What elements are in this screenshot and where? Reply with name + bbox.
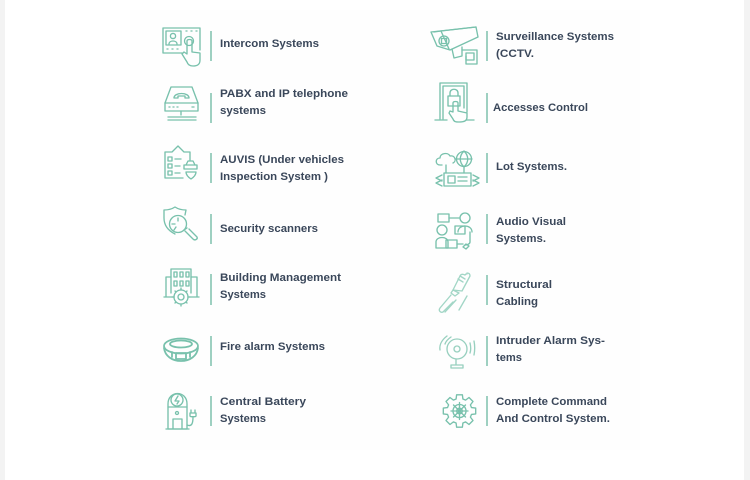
text: tems xyxy=(496,352,522,364)
icon: AUVIS checklist xyxy=(165,146,197,179)
icon: network cable xyxy=(439,273,470,312)
label: AUVIS: AUVIS (Under vehicles xyxy=(220,154,344,166)
text: (CCTV. xyxy=(496,48,534,60)
divider xyxy=(210,214,212,244)
text: Inspection System ) xyxy=(220,171,328,183)
icon: building with gear xyxy=(164,269,199,306)
icon: intruder alarm xyxy=(440,336,475,368)
icon: shield with magnifier xyxy=(164,207,197,240)
icon: IP telephone xyxy=(165,87,198,120)
divider xyxy=(486,396,488,426)
label: Central Battery Systems: Central Battery xyxy=(220,396,307,408)
divider xyxy=(210,274,212,305)
label: Security scanners: Security scanners xyxy=(220,223,318,235)
divider xyxy=(210,93,212,123)
divider xyxy=(486,336,488,366)
text: Systems xyxy=(220,413,266,425)
label: Surveillance Systems (CCTV.: Surveillance Systems xyxy=(496,31,614,43)
divider xyxy=(210,336,212,366)
icon: smoke detector xyxy=(164,338,198,361)
text: Systems. xyxy=(496,233,546,245)
label: Accesses Control: Accesses Control xyxy=(493,102,588,114)
divider xyxy=(210,396,212,426)
label: Intruder Alarm Systems: Intruder Alarm Sys- xyxy=(496,335,605,347)
text: Cabling xyxy=(496,296,538,308)
divider xyxy=(486,275,488,305)
label: Complete Command And Control System.: Complete Command xyxy=(496,396,607,408)
divider xyxy=(210,153,212,183)
label: Building Management Systems: Building Management xyxy=(220,272,341,284)
icon: CCTV camera xyxy=(431,27,478,64)
label: Fire alarm Systems: Fire alarm Systems xyxy=(220,341,325,353)
label: Structural Cabling: Structural xyxy=(496,279,552,291)
text: Systems xyxy=(220,289,266,301)
divider xyxy=(486,31,488,61)
icon: access door with lock xyxy=(435,83,474,122)
icon: intercom panel xyxy=(163,28,200,66)
label: Lot Systems.: Lot Systems. xyxy=(496,161,567,173)
divider xyxy=(486,93,488,123)
label: Intercom Systems: Intercom Systems xyxy=(220,38,319,50)
text: systems xyxy=(220,105,266,117)
icon: IoT cloud and globe xyxy=(436,151,479,186)
icon: audio visual people xyxy=(436,213,472,249)
icon: command gear xyxy=(443,395,476,427)
label: Audio Visual Systems.: Audio Visual xyxy=(496,216,566,228)
icon: battery charger xyxy=(166,394,196,429)
label: PABX and IP telephone systems: PABX and IP telephone xyxy=(220,88,348,100)
text: And Control System. xyxy=(496,413,610,425)
divider xyxy=(486,153,488,183)
divider xyxy=(486,214,488,244)
divider xyxy=(210,31,212,61)
